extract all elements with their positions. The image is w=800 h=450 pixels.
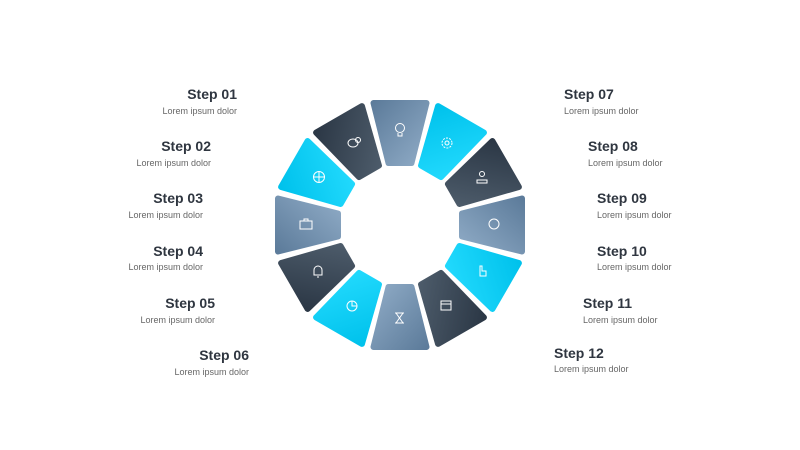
step 07: Lorem ipsum dolor — [564, 106, 639, 116]
step 11: Step 11 — [583, 295, 632, 311]
icon: hand — [480, 266, 486, 276]
segment 90 — [462, 198, 522, 252]
step 12: Lorem ipsum dolor — [554, 364, 629, 374]
step 02: Lorem ipsum dolor — [136, 158, 211, 168]
step 11: Lorem ipsum dolor — [583, 315, 658, 325]
step 11 — [583, 295, 658, 325]
step 12 — [554, 345, 629, 374]
icons — [300, 124, 499, 323]
step 09 — [597, 190, 672, 220]
icon: hourglass — [395, 313, 404, 323]
icon: pie — [347, 301, 357, 311]
segment 0 — [374, 103, 426, 163]
step 02: Step 02 — [161, 138, 211, 154]
icon: bulb — [396, 124, 404, 136]
segment 330 — [316, 106, 392, 185]
icon: bell — [314, 266, 322, 277]
right labels — [554, 86, 672, 374]
step 04 — [128, 243, 203, 272]
step 03 — [128, 190, 203, 220]
step 10: Step 10 — [597, 243, 647, 259]
step 07: Step 07 — [564, 86, 614, 102]
segment 240 — [281, 233, 360, 309]
left labels — [128, 86, 249, 377]
step 01: Lorem ipsum dolor — [162, 106, 237, 116]
step 08: Lorem ipsum dolor — [588, 158, 663, 168]
step 07 — [564, 86, 639, 116]
segment 180 — [374, 287, 426, 347]
step 04: Lorem ipsum dolor — [128, 262, 203, 272]
icon: globe — [314, 172, 324, 182]
step 02 — [136, 138, 211, 168]
segment 120 — [440, 233, 519, 309]
icon: gear — [442, 138, 452, 148]
step 06 — [174, 347, 249, 377]
segment 30 — [408, 106, 484, 185]
step 10: Lorem ipsum dolor — [597, 262, 672, 272]
step 05: Step 05 — [165, 295, 215, 311]
step 09: Lorem ipsum dolor — [597, 210, 672, 220]
step 05: Lorem ipsum dolor — [140, 315, 215, 325]
step 05 — [140, 295, 215, 325]
step 08 — [588, 138, 663, 168]
icon: person — [477, 172, 487, 183]
segment 150 — [408, 265, 484, 344]
step 08: Step 08 — [588, 138, 638, 154]
step 06: Lorem ipsum dolor — [174, 367, 249, 377]
step 03: Step 03 — [153, 190, 203, 206]
step 06: Step 06 — [199, 347, 249, 363]
step 09: Step 09 — [597, 190, 647, 206]
icon: piggy — [348, 138, 360, 147]
step 01 — [162, 86, 237, 116]
icon: briefcase — [300, 219, 312, 229]
segment 60 — [440, 141, 519, 217]
step 10 — [597, 243, 672, 272]
icon: head dollar — [489, 219, 499, 229]
ring diagram — [278, 103, 522, 347]
step 04: Step 04 — [153, 243, 203, 259]
segment 210 — [316, 265, 392, 344]
segment 300 — [281, 141, 360, 217]
step 12: Step 12 — [554, 345, 604, 361]
step 01: Step 01 — [187, 86, 237, 102]
segment 270 — [278, 198, 338, 252]
step 03: Lorem ipsum dolor — [128, 210, 203, 220]
icon: calendar — [441, 301, 451, 310]
